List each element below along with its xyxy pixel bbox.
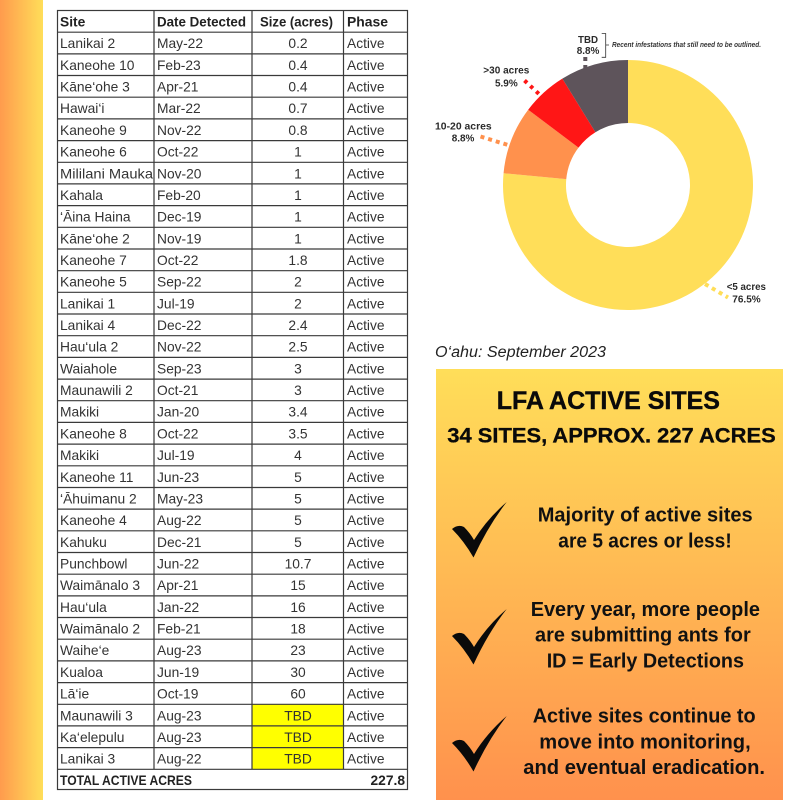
header row — [60, 14, 388, 30]
total row: TOTAL ACTIVE ACRES — [60, 773, 192, 788]
subheading: 34 SITES, APPROX. 227 ACRES — [447, 424, 776, 447]
row: Kaneohe 4: Active — [347, 513, 385, 528]
label: under 5 acres — [727, 281, 766, 306]
row: Lanikai 3 — [60, 752, 385, 767]
row: Kualoa — [60, 665, 385, 680]
row: Ka‘elepulu: Active — [347, 730, 385, 745]
row: Waiahole: 3 — [294, 361, 302, 376]
slice: TBD — [562, 60, 628, 132]
row: Maunawili 3: TBD — [284, 708, 312, 723]
row: Kaneohe 9: 0.8 — [288, 123, 308, 138]
row: Kaneohe 6 — [60, 145, 385, 160]
slice: 10-20 acres — [504, 110, 578, 179]
row: Kaneohe 5: Kaneohe 5 — [60, 275, 127, 290]
row: Waimānalo 2: 18 — [290, 622, 306, 636]
label: over 30 acres — [483, 64, 529, 90]
icon: check mark 1 — [452, 502, 507, 558]
bullet 1 — [538, 505, 753, 553]
slice: over 30 acres — [528, 79, 595, 148]
row: Kāne‘ohe 2: 1 — [294, 231, 302, 246]
row: Kahala: 1 — [294, 188, 302, 203]
row: Kaneohe 9: Active — [347, 123, 385, 138]
row: Lanikai 4: 2.4 — [288, 318, 308, 333]
row: Kāne‘ohe 2: Kāne‘ohe 2 — [60, 231, 130, 246]
row: Kāne‘ohe 3: Kāne‘ohe 3 — [60, 80, 130, 94]
row: ‘Āina Haina: Dec-19 — [157, 210, 202, 225]
row: Kaneohe 9 — [60, 123, 385, 138]
row: Kaneohe 5: Sep-22 — [157, 275, 202, 290]
row: Maunawili 3: Aug-23 — [157, 708, 202, 723]
row: Hawai‘i: Mar-22 — [157, 101, 201, 116]
row: Kaneohe 11 — [60, 470, 385, 485]
row: Kāne‘ohe 2 — [60, 231, 385, 246]
row: Waiahole — [60, 361, 385, 376]
row: Mililani Mauka: 1 — [294, 166, 302, 181]
donut chart — [503, 60, 753, 310]
label: under 5 acres: 76.5% — [732, 294, 761, 306]
row: Kaneohe 7: Active — [347, 253, 385, 268]
row: Waihe‘e — [60, 643, 385, 658]
row: Lā‘ie: Oct-19 — [157, 687, 199, 702]
row: Kaneohe 11: Jun-23 — [157, 470, 200, 485]
row: ‘Āina Haina: ‘Āina Haina — [60, 210, 131, 225]
row: ‘Āhuimanu 2 — [60, 492, 385, 506]
row: Maunawili 2: Maunawili 2 — [60, 383, 133, 398]
label: over 30 acres: >30 acres — [483, 64, 529, 76]
header row: Date Detected — [157, 14, 246, 30]
leader: under 5 acres — [705, 284, 728, 298]
row: Waimānalo 2: Active — [347, 622, 385, 636]
row: Kāne‘ohe 3: 0.4 — [288, 80, 308, 94]
row: Kaneohe 6: Active — [347, 145, 385, 160]
row: Kāne‘ohe 3: Active — [347, 80, 385, 94]
row: Kaneohe 11: Kaneohe 11 — [60, 470, 133, 485]
label: TBD — [577, 34, 600, 57]
label: TBD: TBD — [578, 34, 598, 46]
leader: 10-20 acres — [480, 136, 508, 145]
row: Punchbowl — [60, 556, 385, 572]
row: Kaneohe 8 — [60, 426, 385, 441]
row: Lā‘ie: 60 — [290, 687, 306, 702]
row: Makiki: Jul-19 — [157, 448, 195, 463]
row: Ka‘elepulu: Aug-23 — [157, 730, 202, 745]
label: 10-20 acres: 10-20 acres — [435, 120, 492, 132]
row: ‘Āhuimanu 2: ‘Āhuimanu 2 — [60, 492, 137, 506]
bullet 2: ID = Early Detections — [547, 650, 744, 672]
row: Lanikai 3: Active — [347, 752, 385, 767]
row: Kaneohe 4: 5 — [294, 513, 302, 528]
row: Lanikai 3: Lanikai 3 — [60, 752, 116, 767]
row: Hau‘ula: Active — [347, 600, 385, 615]
row: Hawai‘i: Hawai‘i — [60, 101, 104, 116]
row: Punchbowl: Active — [347, 556, 385, 572]
row: Waimānalo 2: Feb-21 — [157, 622, 201, 636]
row: Makiki: Active — [347, 448, 385, 463]
row: Hau‘ula 2: 2.5 — [288, 340, 308, 355]
row: Waiahole: Waiahole — [60, 361, 117, 376]
icon: check mark 2 — [452, 609, 507, 664]
label: 10-20 acres: 8.8% — [452, 133, 475, 145]
row: Makiki: Makiki — [60, 405, 99, 420]
row: ‘Āhuimanu 2: 5 — [294, 492, 302, 506]
row: Waiahole: Active — [347, 361, 385, 376]
row: Kaneohe 8: Kaneohe 8 — [60, 426, 127, 441]
row: Kahuku: Dec-21 — [157, 535, 201, 550]
row: Waimānalo 2: Waimānalo 2 — [60, 622, 140, 636]
row: Kahala: Feb-20 — [157, 188, 201, 203]
row: Maunawili 2: Active — [347, 383, 385, 398]
label: TBD: 8.8% — [577, 45, 600, 57]
row: Maunawili 2 — [60, 383, 385, 398]
row: Hau‘ula 2: Active — [347, 340, 385, 355]
row: Makiki: 4 — [294, 448, 302, 463]
row: Mililani Mauka — [60, 166, 385, 181]
row: ‘Āhuimanu 2: Active — [347, 492, 385, 506]
row: Waimānalo 3: 15 — [290, 578, 306, 593]
icon: check mark 3 — [452, 716, 507, 772]
row: Kahuku: 5 — [294, 535, 302, 550]
header row: Phase — [347, 14, 388, 30]
row: Waimānalo 3: Apr-21 — [157, 578, 198, 593]
total row: 227.8 — [370, 773, 405, 788]
row: Lanikai 3: Aug-22 — [157, 752, 202, 767]
row: Makiki — [60, 448, 385, 463]
row: Lā‘ie: Lā‘ie — [60, 687, 89, 702]
row: Kaneohe 4: Kaneohe 4 — [60, 513, 127, 528]
row: Kaneohe 10: 0.4 — [288, 58, 308, 73]
bullet 1: are 5 acres or less! — [558, 531, 732, 553]
table grid — [58, 10, 408, 790]
total row — [60, 773, 405, 788]
heading: LFA ACTIVE SITES — [497, 387, 720, 415]
chart caption: O‘ahu: September 2023 — [435, 344, 606, 361]
row: ‘Āhuimanu 2: May-23 — [157, 492, 203, 506]
bullet 2 — [531, 599, 760, 672]
row: Kāne‘ohe 3: Apr-21 — [157, 80, 198, 94]
row: Maunawili 2: 3 — [294, 383, 302, 398]
row: Waimānalo 2 — [60, 622, 385, 636]
row: Maunawili 3 — [60, 708, 385, 723]
bullet 1: Majority of active sites — [538, 505, 753, 527]
row: Kaneohe 6: Oct-22 — [157, 145, 198, 160]
row: Hau‘ula: Jan-22 — [157, 600, 199, 615]
table: active sites — [58, 10, 408, 790]
row: Lanikai 1: Active — [347, 296, 385, 311]
row: Hau‘ula 2 — [60, 340, 385, 355]
row: Kaneohe 10: Feb-23 — [157, 58, 201, 73]
row: Kaneohe 7: 1.8 — [288, 253, 308, 268]
row: Kaneohe 5: 2 — [294, 275, 302, 290]
row: Kaneohe 7: Kaneohe 7 — [60, 253, 127, 268]
bracket for TBD note — [602, 34, 609, 57]
row: Kualoa: Active — [347, 665, 385, 680]
row: Kahuku: Active — [347, 535, 385, 550]
row: Mililani Mauka: Active — [347, 166, 385, 181]
row: Makiki — [60, 405, 385, 420]
row: Kahala: Kahala — [60, 188, 103, 203]
row: Ka‘elepulu: Ka‘elepulu — [60, 730, 124, 745]
row: Kaneohe 7: Oct-22 — [157, 253, 198, 268]
row: Lanikai 1 — [60, 296, 385, 311]
left gradient strip — [0, 0, 43, 800]
label: under 5 acres: <5 acres — [727, 281, 766, 293]
row: Waihe‘e: 23 — [290, 643, 306, 658]
row: Hau‘ula 2: Hau‘ula 2 — [60, 340, 118, 355]
row: Hawai‘i: 0.7 — [288, 101, 308, 116]
bullet 3: and eventual eradication. — [523, 757, 765, 779]
row: Kaneohe 8: Active — [347, 426, 385, 441]
row: Lanikai 4: Active — [347, 318, 385, 333]
highlighted TBD cells — [252, 704, 344, 769]
row: ‘Āina Haina: 1 — [294, 210, 302, 225]
leader: over 30 acres — [524, 80, 539, 94]
bullet 3: Active sites continue to — [533, 706, 756, 728]
row: Kualoa: 30 — [290, 665, 306, 680]
row: Lanikai 1: Jul-19 — [157, 296, 195, 311]
header row: Site — [60, 14, 86, 30]
row: Kaneohe 10: Active — [347, 58, 385, 73]
row: Lanikai 2: May-22 — [157, 36, 203, 51]
row: Punchbowl: Jun-22 — [157, 556, 199, 572]
row: Waimānalo 3 — [60, 578, 385, 593]
row: Makiki: Makiki — [60, 448, 99, 463]
row: Kahala: Active — [347, 188, 385, 203]
slice: under 5 acres — [503, 60, 753, 310]
row: Waimānalo 3: Active — [347, 578, 385, 593]
row: Kaneohe 10 — [60, 58, 385, 73]
row: Kaneohe 11: Active — [347, 470, 385, 485]
row: Kaneohe 4 — [60, 513, 385, 528]
row: Lanikai 3: TBD — [284, 752, 312, 767]
row: ‘Āina Haina — [60, 210, 385, 225]
row: Lanikai 1: 2 — [294, 296, 302, 311]
row: Hau‘ula: Hau‘ula — [60, 600, 107, 615]
row: Waihe‘e: Active — [347, 643, 385, 658]
row: Hawai‘i — [60, 101, 385, 116]
row: Maunawili 2: Oct-21 — [157, 383, 198, 398]
row: Kāne‘ohe 3 — [60, 80, 385, 94]
row: Lanikai 2: Lanikai 2 — [60, 36, 115, 51]
leader: TBD — [583, 57, 587, 69]
row: Hau‘ula — [60, 600, 385, 615]
row: ‘Āina Haina: Active — [347, 210, 385, 225]
row: Makiki: Active — [347, 405, 385, 420]
row: Lanikai 1: Lanikai 1 — [60, 296, 115, 311]
row: Kaneohe 11: 5 — [294, 470, 302, 485]
row: Kāne‘ohe 2: Active — [347, 231, 385, 246]
row: Lanikai 4: Lanikai 4 — [60, 318, 116, 333]
row: Kahala — [60, 188, 385, 203]
row: Kaneohe 8: Oct-22 — [157, 426, 198, 441]
row: Ka‘elepulu: TBD — [284, 730, 312, 745]
bullet 3 — [523, 706, 765, 779]
row: Punchbowl: Punchbowl — [60, 556, 128, 572]
row: Kaneohe 5 — [60, 275, 385, 290]
panel: LFA active sites summary — [436, 369, 783, 800]
row: Kahuku: Kahuku — [60, 535, 107, 550]
row: Lanikai 2 — [60, 36, 385, 51]
row: Lanikai 4: Dec-22 — [157, 318, 201, 333]
row: Mililani Mauka: Mililani Mauka — [60, 166, 153, 181]
row: Kaneohe 9: Kaneohe 9 — [60, 123, 127, 138]
row: Kaneohe 4: Aug-22 — [157, 513, 202, 528]
row: Kualoa: Jun-19 — [157, 665, 200, 680]
header row: Size (acres) — [260, 14, 333, 30]
row: Maunawili 3: Active — [347, 708, 385, 723]
row: Ka‘elepulu — [60, 730, 385, 745]
row: Kaneohe 6: 1 — [294, 145, 302, 160]
row: Lanikai 2: 0.2 — [288, 36, 308, 51]
row: Hau‘ula 2: Nov-22 — [157, 340, 201, 355]
row: Waiahole: Sep-23 — [157, 361, 202, 376]
row: Lā‘ie — [60, 687, 385, 702]
TBD note: Recent infestations that still need to be outlined. — [612, 42, 761, 49]
row: Makiki: Jan-20 — [157, 405, 200, 420]
row: Hau‘ula: 16 — [290, 600, 306, 615]
row: Kualoa: Kualoa — [60, 665, 103, 680]
row: Lanikai 2: Active — [347, 36, 385, 51]
row: Kaneohe 10: Kaneohe 10 — [60, 58, 135, 73]
row: Kaneohe 7 — [60, 253, 385, 268]
bullet 2: Every year, more people — [531, 599, 760, 621]
row: Makiki: 3.4 — [288, 405, 308, 420]
row: Waimānalo 3: Waimānalo 3 — [60, 578, 140, 593]
row: Lanikai 4 — [60, 318, 385, 333]
row: Lā‘ie: Active — [347, 687, 385, 702]
row: Punchbowl: 10.7 — [285, 556, 311, 572]
row: Kaneohe 9: Nov-22 — [157, 123, 201, 138]
row: Kaneohe 5: Active — [347, 275, 385, 290]
row: Maunawili 3: Maunawili 3 — [60, 708, 133, 723]
row: Kaneohe 8: 3.5 — [288, 426, 308, 441]
row: Waihe‘e: Aug-23 — [157, 643, 202, 658]
row: Mililani Mauka: Nov-20 — [157, 166, 202, 181]
row: Kahuku — [60, 535, 385, 550]
row: Kaneohe 6: Kaneohe 6 — [60, 145, 127, 160]
row: Kāne‘ohe 2: Nov-19 — [157, 231, 202, 246]
label: 10-20 acres — [435, 120, 492, 145]
label: over 30 acres: 5.9% — [495, 78, 518, 90]
bullet 3: move into monitoring, — [539, 731, 751, 753]
row: Waihe‘e: Waihe‘e — [60, 643, 110, 658]
bullet 2: are submitting ants for — [535, 625, 751, 647]
panel background — [436, 369, 783, 800]
row: Hawai‘i: Active — [347, 101, 385, 116]
